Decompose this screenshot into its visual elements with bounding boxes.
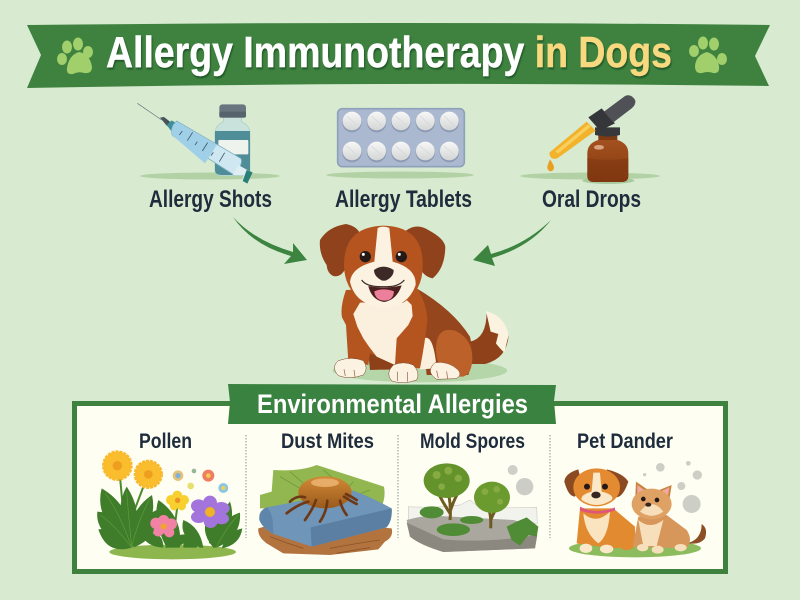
rock (407, 516, 538, 552)
icon: left paw (57, 38, 93, 74)
pillow (260, 465, 385, 508)
label: Allergy Tablets (335, 186, 472, 213)
icon: dog and cat (564, 461, 706, 557)
icon: syringe (137, 103, 253, 184)
ground shadow (333, 359, 507, 382)
heading ribbon: Environmental Allergies (257, 389, 528, 419)
shadow (326, 172, 474, 178)
dog head (573, 468, 620, 506)
cat ears (635, 482, 648, 497)
paws (334, 358, 460, 383)
haunch (436, 330, 472, 377)
label: pet dander: Pet Dander (577, 430, 673, 453)
mouth (368, 285, 402, 302)
cat paws (637, 544, 687, 554)
chest (353, 300, 413, 365)
nose (374, 267, 394, 281)
eyes (360, 251, 371, 262)
shadow (140, 172, 280, 180)
dog body (577, 508, 635, 548)
cat body (633, 515, 690, 548)
moss (420, 506, 538, 546)
title banner (27, 23, 770, 88)
icon: bottle (582, 127, 634, 184)
icon: dropper (547, 95, 635, 171)
icon: right paw (689, 36, 727, 73)
icon: dust mite on mattress (258, 465, 392, 555)
mite legs (287, 494, 357, 522)
mattress (259, 491, 392, 547)
trees (438, 487, 498, 528)
tail (470, 312, 509, 364)
front body and legs (341, 287, 427, 368)
label: Allergy Shots (149, 186, 272, 213)
mite body (298, 476, 352, 508)
cat tail (687, 524, 706, 544)
under belly (368, 353, 397, 370)
item: allergy shots (137, 103, 280, 213)
heading ribbon (228, 384, 556, 424)
cat head (632, 489, 672, 519)
spores (508, 465, 518, 475)
label: mold spores: Mold Spores (420, 430, 525, 453)
icon: pollen flowers (97, 452, 242, 559)
arrow: right to dog (473, 220, 551, 266)
head (344, 226, 423, 303)
title text: Allergy Immunotherapy in Dogs (106, 28, 672, 77)
body back (417, 288, 472, 375)
dog collar (580, 507, 615, 514)
dander (643, 461, 702, 513)
icon: mold spores (407, 463, 538, 552)
icon: vial (215, 104, 250, 176)
purple flower (191, 496, 230, 528)
dog illustration (320, 224, 509, 383)
label: dust mites: Dust Mites (281, 430, 374, 453)
pink flower (150, 515, 177, 537)
arrow: left to dog (233, 217, 307, 264)
panel: environmental allergies (74, 384, 726, 572)
face white (350, 227, 416, 308)
shadow (520, 172, 660, 180)
dog paws (580, 544, 613, 553)
item: allergy tablets (326, 109, 474, 213)
wood (258, 522, 392, 555)
yellow flowers (103, 452, 162, 488)
belly white (419, 338, 437, 369)
dog ears (564, 469, 582, 497)
icon: blister pack (338, 109, 464, 167)
label: Oral Drops (542, 186, 641, 213)
label: pollen: Pollen (139, 430, 192, 453)
small yellow flower (166, 491, 189, 510)
ears (320, 224, 360, 276)
pollen specks (173, 470, 183, 481)
item: oral drops (520, 95, 660, 213)
